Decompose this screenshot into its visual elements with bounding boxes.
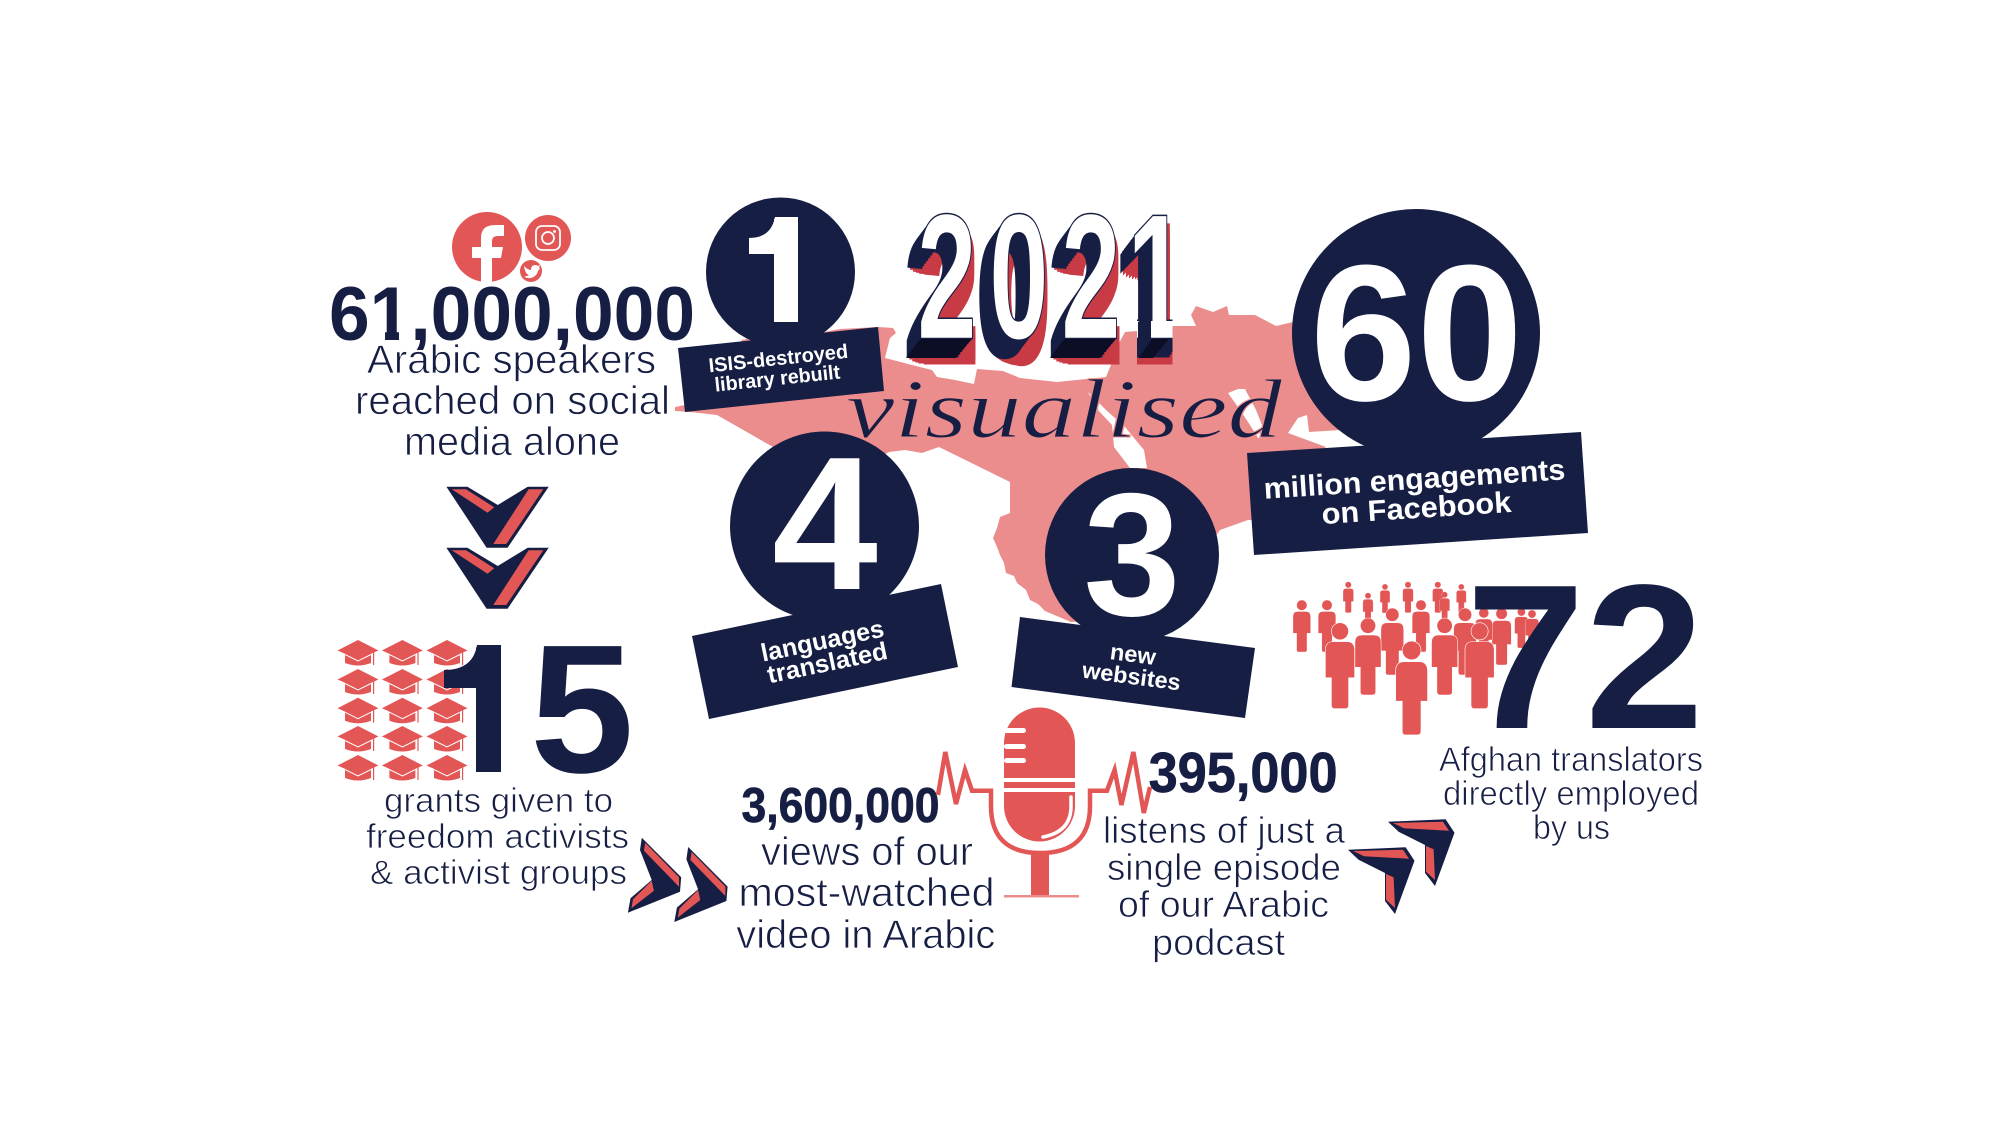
badge: 3 new websites <box>1012 458 1255 718</box>
title: 2021 with 3D extrusion: 202 <box>917 176 1133 376</box>
stat: 15 grants: freedom activists <box>366 818 629 856</box>
map of the Arabic-speaking region <box>675 306 1370 622</box>
stat: 3,600,000 views: video in Arabic <box>736 913 995 957</box>
stat: 72 Afghan translators: 72 <box>1466 542 1704 772</box>
stat: 395,000 listens: single episode <box>1107 847 1341 888</box>
social media icons <box>452 212 571 282</box>
badge: 60 million engagements: on Facebook <box>1321 486 1513 531</box>
stat: 72 Afghan translators <box>1439 542 1704 847</box>
stat: 395,000 listens <box>1103 741 1345 963</box>
icon: graduation caps <box>338 640 468 780</box>
badge: 4 languages translated: languages <box>758 615 886 668</box>
badge: 3 new websites: websites <box>1080 657 1182 695</box>
stat: 3,600,000 views: 3,600,000 <box>742 779 940 833</box>
stat: 395,000 listens: of our Arabic <box>1118 884 1329 925</box>
stat: 72 Afghan translators: directly employed <box>1443 775 1699 813</box>
stat: 395,000 listens: listens of just a <box>1103 810 1345 851</box>
icon: crowd of people <box>1293 582 1539 735</box>
title: 2021 with 3D extrusion <box>906 212 1172 366</box>
stat: 3,600,000 views: views of our <box>761 830 973 874</box>
badge: 1 library rebuilt: ISIS-destroyed <box>708 341 849 377</box>
title: 2021 with 3D extrusion: 1 <box>1127 176 1187 376</box>
stat: 61,000,000 Arabic speakers <box>332 286 692 456</box>
badge: 1 library rebuilt: 1 <box>733 186 816 354</box>
stat: 15 grants: 1 <box>424 609 525 811</box>
badge: 1 library rebuilt: library rebuilt <box>714 361 842 397</box>
badge: 3 new websites: 3 <box>1083 458 1181 653</box>
handwritten word: visualised: visualised <box>846 363 1283 456</box>
stat: 61,000,000 Arabic speakers: Arabic speakers <box>367 338 656 382</box>
badge: 4 languages translated <box>692 418 958 719</box>
stat: 15 grants: grants given to <box>384 782 613 820</box>
badge: 60 million engagements: million engagements <box>1263 453 1566 506</box>
stat: 61,000,000 Arabic speakers: 61,000,000 <box>329 272 695 357</box>
stat: 15 grants <box>366 645 629 891</box>
stat: 15 grants: 5 <box>530 606 634 811</box>
stat: 72 Afghan translators: by us <box>1533 809 1610 847</box>
arrows: right chevrons <box>628 838 728 922</box>
stat: 72 Afghan translators: Afghan translators <box>1439 741 1703 779</box>
arrows: down chevrons <box>446 487 549 609</box>
badge: 60 million engagements <box>1247 209 1588 555</box>
stat: 3,600,000 views <box>736 779 995 957</box>
stat: 395,000 listens: 395,000 <box>1149 741 1338 805</box>
badge: 1 library rebuilt <box>678 186 884 412</box>
stat: 61,000,000 Arabic speakers: reached on social <box>355 379 670 423</box>
stat: 61,000,000 Arabic speakers: media alone <box>404 420 620 464</box>
icon: microphone with sound waves <box>938 708 1150 898</box>
stat: 3,600,000 views: most-watched <box>738 871 994 915</box>
badge: 4 languages translated: 4 <box>772 418 878 630</box>
badge: 60 million engagements: 60 <box>1310 225 1523 442</box>
stat: 15 grants: & activist groups <box>370 854 627 892</box>
badge: 4 languages translated: translated <box>765 637 890 689</box>
arrows: corner chevrons <box>1348 819 1454 914</box>
badge: 3 new websites: new <box>1109 638 1158 670</box>
stat: 395,000 listens: podcast <box>1152 922 1286 963</box>
